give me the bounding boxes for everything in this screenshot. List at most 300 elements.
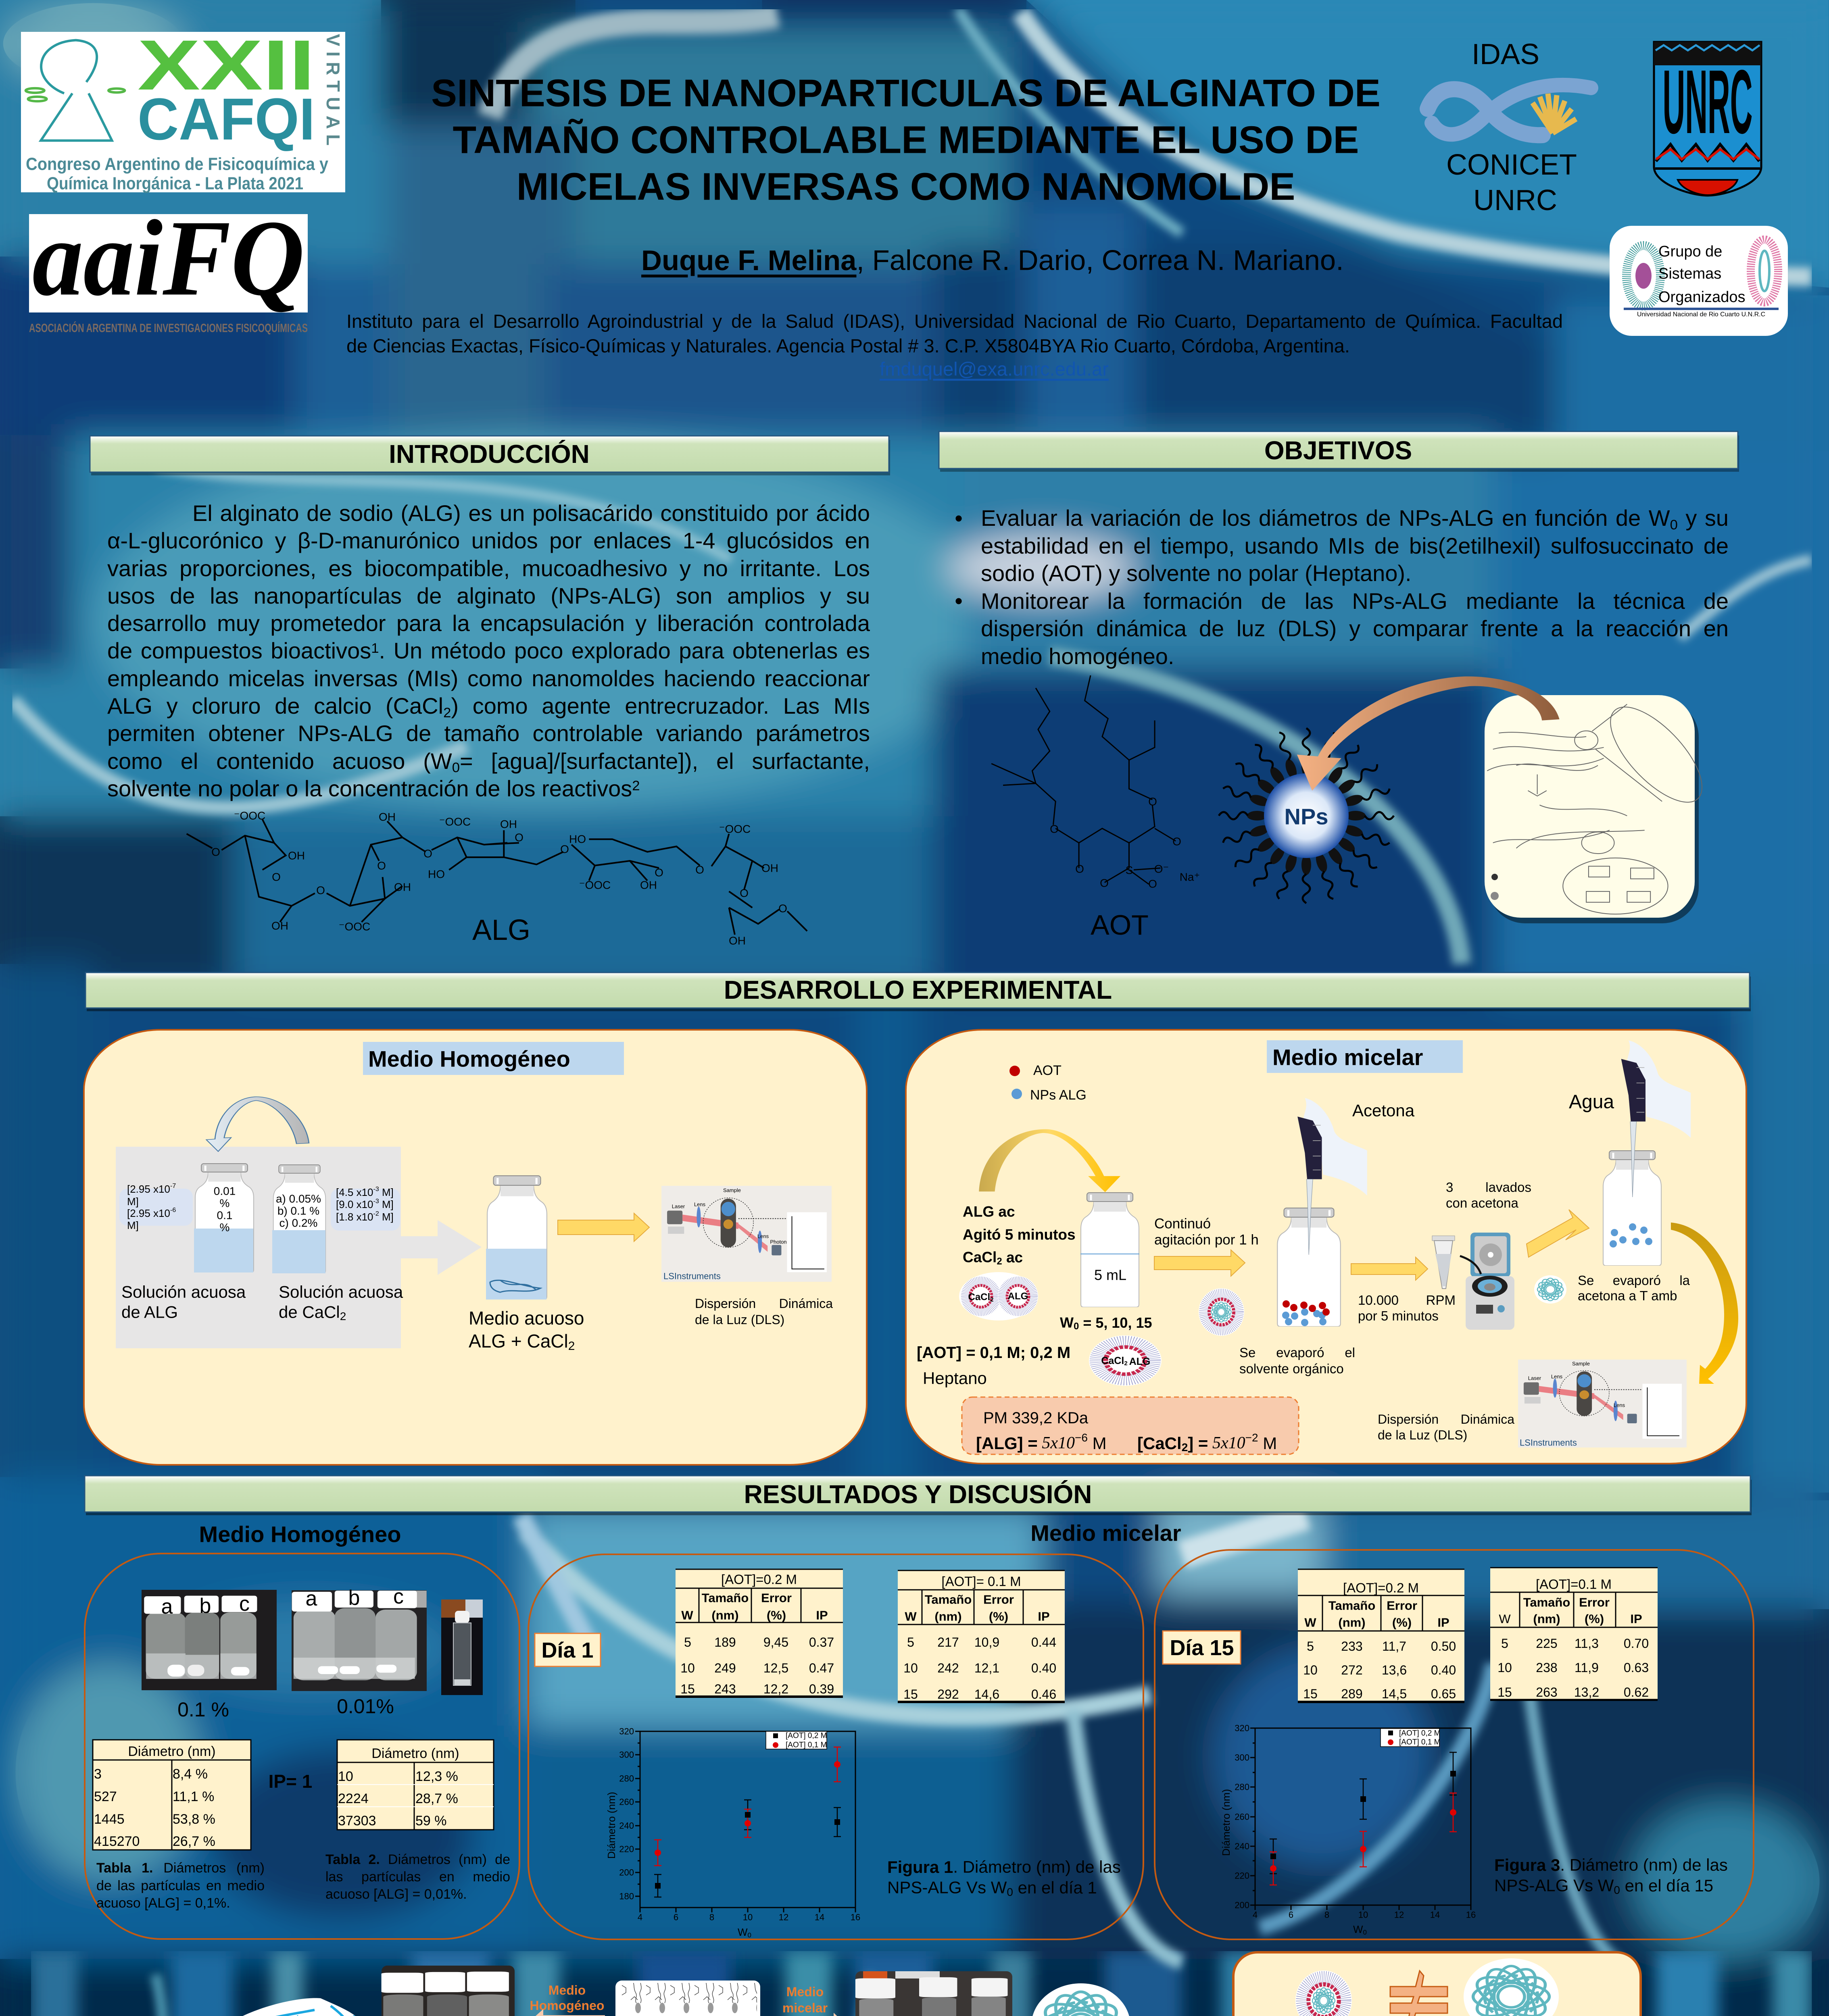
arrow: curved orange: [1297, 677, 1560, 791]
chemical structure: ALG: HO: [428, 868, 445, 881]
gray box with two solutions: %: [220, 1221, 229, 1234]
label: medio micelar: [782, 1985, 828, 2015]
gray box with two solutions: Solución acuosa: [121, 1282, 246, 1302]
chart: diameter vs W0 day 15: 200: [1235, 1900, 1249, 1910]
chemical structure: AOT: S: [1126, 864, 1133, 877]
table: AOT 0.2 M day 15: Error: [1387, 1598, 1417, 1613]
micelles: CaCl2 and ALG: CaCl: [968, 1292, 990, 1302]
chemical structure: AOT: AOT: [1091, 909, 1149, 941]
table: AOT 0.2 M day 15: 0.50: [1431, 1639, 1456, 1654]
table: AOT 0.2 M day 15: 13,6: [1382, 1663, 1407, 1677]
table: AOT 0.1 M day 15: (nm): [1533, 1612, 1560, 1626]
caption: figura 1: Figura 1. Diámetro (nm) de las: [887, 1857, 1121, 1876]
arrow: yellow: [558, 1213, 649, 1241]
label: medio homogéneo: Medio: [548, 1983, 586, 1997]
chemical structure: ALG: OH: [640, 879, 657, 891]
label: IP: IP= 1: [269, 1771, 312, 1792]
chemical structure: ALG: OH: [379, 810, 396, 823]
heading bar: DESARROLLO EXPERIMENTAL: DESARROLLO EXPERIMENTAL: [724, 975, 1112, 1004]
caption: figura 1: en el día 1: [1013, 1878, 1097, 1897]
label: Heptano: Heptano: [923, 1368, 987, 1388]
label: medio acuoso: ALG + CaCl: [469, 1331, 568, 1352]
illustration: aggregated alginate blob: [216, 1998, 362, 2016]
chart: diameter vs W0 day 15: W: [1353, 1923, 1363, 1935]
gray box with two solutions: M]: [379, 1211, 394, 1223]
caption: tabla 2: Tabla 2. Diámetros (nm) de: [325, 1852, 510, 1867]
gray box with two solutions: de CaCl: [279, 1302, 340, 1322]
chemical structure: ALG: OH: [271, 919, 288, 932]
logo: aaiFQ: aaiFQ: [32, 198, 304, 319]
caption: tabla 2: [325, 1851, 510, 1904]
chart: diameter vs W0 day 15: Diámetro (nm): [1220, 1789, 1232, 1856]
table: AOT 0.2 M day 1: (%): [767, 1608, 786, 1622]
table: AOT 0.1 M day 1: 14,6: [974, 1687, 999, 1702]
table 1: 527: [94, 1789, 117, 1804]
chemical structure: ALG: O: [655, 866, 663, 879]
table 1: 1445: [94, 1812, 125, 1827]
label: lavados: 3 lavados: [1446, 1180, 1531, 1195]
label: W0: 0: [1074, 1321, 1079, 1331]
table: AOT 0.2 M day 15: 10: [1303, 1663, 1318, 1677]
heading bar: OBJETIVOS: [939, 431, 1739, 472]
gray box with two solutions: -2: [373, 1210, 379, 1217]
table: AOT 0.2 M day 15: Tamaño: [1328, 1598, 1375, 1613]
table: AOT 0.2 M day 1: 5: [684, 1635, 691, 1649]
legend: [1009, 1063, 1087, 1103]
callout: concentrations: ] =: [1188, 1434, 1208, 1452]
chemical structure: ALG: O: [778, 902, 787, 914]
introduction text: solvente no polar o la concentración de los reactivos2: [107, 776, 640, 801]
caption: tabla 2: las partículas en medio: [325, 1869, 510, 1885]
caption: figura 1: 0: [1007, 1885, 1013, 1898]
reagent list: ac: [1002, 1249, 1023, 1265]
table 2: 2224: [338, 1791, 369, 1806]
caption: figura 3: 0: [1614, 1884, 1620, 1896]
table: AOT 0.1 M day 1: Error: [983, 1593, 1014, 1606]
image: DLS scheme: Laser: [672, 1203, 685, 1210]
legend: AOT: [1033, 1063, 1062, 1078]
table: AOT 0.1 M day 1: 292: [937, 1687, 959, 1702]
logo: IDAS CONICET UNRC: [1428, 38, 1591, 217]
chemical structure: ALG: ⁻OOC: [579, 879, 611, 891]
icon: not equal: [1390, 1971, 1447, 2016]
table: AOT 0.1 M day 15: 0.62: [1624, 1685, 1649, 1699]
image: DLS scheme: Lens: [757, 1233, 769, 1239]
table: AOT 0.2 M day 1: 0.39: [809, 1682, 834, 1696]
chart: diameter vs W0 day 15: 12: [1394, 1910, 1404, 1920]
micelles: CaCl2 and ALG: ALG: [1008, 1291, 1028, 1302]
chart: diameter vs W0 day 1: 4: [638, 1912, 642, 1922]
table: AOT 0.2 M day 1: 249: [714, 1661, 736, 1675]
gray box with two solutions: [116, 1147, 403, 1348]
chart: diameter vs W0 day 1: 14: [815, 1912, 824, 1922]
chemical structure: ALG: O: [272, 871, 281, 883]
label: 0.1 %: 0.1 %: [177, 1698, 229, 1721]
chart: diameter vs W0 day 1: 12: [779, 1912, 788, 1922]
logo: XXII CAFQI congress: [21, 26, 345, 194]
table: AOT 0.1 M day 15: W: [1499, 1612, 1511, 1626]
chart: diameter vs W0 day 15: 10: [1358, 1910, 1368, 1920]
table: AOT 0.1 M day 15: 238: [1536, 1660, 1558, 1675]
table 2: 59 %: [415, 1813, 447, 1829]
chart: diameter vs W0 day 15: 260: [1235, 1812, 1249, 1822]
authors: Duque F. Melina, Falcone R. Dario, Correa N. Mariano.: [641, 244, 1344, 276]
introduction text: [107, 500, 870, 803]
table: AOT 0.1 M day 1: IP: [1038, 1610, 1050, 1623]
chart: diameter vs W0 day 1: 0: [748, 1931, 751, 1939]
arrow: yellow 1: [1154, 1250, 1245, 1276]
label: se evaporó el solvente: solvente orgánico: [1239, 1361, 1344, 1376]
table 2: 37303: [338, 1813, 376, 1829]
chemical structure: ALG: ⁻OOC: [719, 823, 751, 835]
logo: Grupo de Sistemas Organizados: Grupo de: [1658, 243, 1722, 260]
table: AOT 0.2 M day 15: 0.65: [1431, 1687, 1456, 1701]
chart: diameter vs W0 day 1: 220: [619, 1844, 634, 1854]
introduction text: permiten obtener NPs-ALG de tamaño controlable variando parámetros: [107, 721, 870, 746]
arrow: gold curved right: [1671, 1223, 1738, 1384]
icon: microtube: [1432, 1236, 1455, 1289]
gray box with two solutions: M]: [127, 1219, 139, 1231]
caption: tabla 1: acuoso [ALG] = 0,1%.: [96, 1895, 230, 1911]
table: AOT 0.2 M day 1: 243: [714, 1682, 736, 1696]
caption: DLS: [695, 1295, 833, 1328]
caption: tabla 2: acuoso [ALG] = 0,01%.: [325, 1887, 467, 1902]
chart: diameter vs W0 day 1: Diámetro (nm): [605, 1792, 617, 1859]
chemical structure: AOT: Na⁺: [1180, 871, 1200, 883]
label: 0.01%: 0.01%: [337, 1695, 394, 1718]
table: AOT 0.1 M day 1: 0.44: [1031, 1635, 1056, 1649]
introduction text: de compuestos bioactivos1. Un método poco explorado para obtenerlas es: [107, 638, 870, 663]
callout: concentrations: −6: [1075, 1431, 1088, 1443]
table 2: 12,3 %: [415, 1769, 458, 1784]
table: AOT 0.2 M day 1: 0.37: [809, 1635, 834, 1649]
objectives list: Monitorear la formación de las NPs-ALG mediante la técnica de: [981, 588, 1729, 614]
introduction text: α-L-glucorónico y β-D-manurónico unidos por enlaces 1-4 glucósidos en: [107, 528, 870, 553]
panel: resultados medio homogéneo: [85, 1554, 519, 1939]
introduction text: desarrollo muy prometedor para la encapsulación y liberación controlada: [107, 610, 870, 636]
table: AOT 0.1 M day 15: Tamaño: [1523, 1595, 1570, 1610]
callout: concentrations: M: [1088, 1434, 1107, 1452]
chart: diameter vs W0 day 15: 8: [1324, 1910, 1329, 1920]
subheading: Medio micelar: Medio micelar: [1030, 1520, 1181, 1546]
vial: 5 mL: [1080, 1193, 1139, 1307]
chemical structure: AOT: O: [1172, 835, 1181, 848]
chart: diameter vs W0 day 1: 16: [851, 1912, 860, 1922]
table 1: [93, 1740, 251, 1850]
chart: diameter vs W0 day 1: 10: [743, 1912, 753, 1922]
table 1: 3: [94, 1766, 102, 1782]
image: DLS scheme: Sample: [1572, 1360, 1590, 1367]
label: continuó agitación: Continuó: [1154, 1216, 1211, 1231]
photo: vials 0.1 %: b: [200, 1594, 211, 1618]
image: DLS scheme: [1518, 1360, 1687, 1447]
chemical structure: AOT: O: [1148, 795, 1157, 808]
panel: día 1: [528, 1554, 1143, 1939]
arrow: to the left: [529, 2009, 605, 2016]
chart: diameter vs W0 day 1: 260: [619, 1797, 634, 1807]
gray box with two solutions: -7: [170, 1182, 176, 1189]
reagent list: [963, 1203, 1076, 1267]
chart: diameter vs W0 day 1: [605, 1727, 860, 1939]
chemical structure: ALG: O: [211, 846, 220, 858]
gray box with two solutions: -3: [373, 1185, 379, 1193]
table: AOT 0.1 M day 1: 12,1: [974, 1661, 999, 1675]
chemical structure: AOT: O: [1100, 877, 1109, 889]
arrow: large gray: [401, 1220, 482, 1275]
chart: diameter vs W0 day 15: 240: [1235, 1841, 1249, 1851]
gray box with two solutions: 2: [340, 1310, 346, 1322]
table: AOT 0.1 M day 15: 10: [1497, 1660, 1512, 1675]
gray box with two solutions: a) 0.05%: [276, 1193, 321, 1205]
chemical structure: ALG: O: [377, 860, 386, 872]
panel: Medio Homogéneo procedure: [84, 1030, 867, 1465]
table: AOT 0.2 M day 1: 0.47: [809, 1661, 834, 1675]
table: AOT 0.1 M day 15: 0.63: [1624, 1660, 1649, 1675]
table: AOT 0.2 M day 15: 233: [1341, 1639, 1363, 1654]
illustration: nanoparticle micelle: NPs: [1285, 804, 1328, 829]
subheading: Medio Homogéneo: Medio Homogéneo: [199, 1522, 401, 1547]
photo: vials 0.1 %: a: [161, 1595, 173, 1618]
title: TAMAÑO CONTROLABLE MEDIANTE EL USO DE: [453, 118, 1359, 161]
panel heading: Medio Homogéneo: [368, 1046, 570, 1072]
panel: día 15: [1155, 1550, 1754, 1939]
logo: Grupo de Sistemas Organizados: Sistemas: [1658, 265, 1721, 282]
label: se evaporó la acetona: Se evaporó la: [1578, 1273, 1690, 1288]
table 2: 28,7 %: [415, 1791, 458, 1806]
chemical structure: ALG: ⁻OOC: [339, 920, 370, 933]
illustration: nanoparticle micelle: [1219, 728, 1394, 903]
label: medio micelar: micelar: [782, 2001, 828, 2015]
table: AOT 0.2 M day 1: [676, 1569, 843, 1697]
table: AOT 0.2 M day 1: 12,5: [763, 1661, 788, 1675]
micelle: mixed: CaCl: [1101, 1355, 1124, 1366]
caption: tabla 1: [96, 1860, 265, 1913]
label: continuó agitación: [1154, 1216, 1259, 1248]
image: DLS scheme: Photon: [770, 1239, 787, 1245]
chart: diameter vs W0 day 1: 8: [709, 1912, 714, 1922]
chart: diameter vs W0 day 15: 0: [1363, 1928, 1367, 1936]
introduction text: varias proporciones, es biocompatible, mucoadhesivo y no irritante. Los: [107, 556, 870, 581]
image: DLS scheme: LSInstruments: [663, 1271, 721, 1281]
objectives list: •: [955, 588, 963, 614]
table: AOT 0.2 M day 15: [AOT]=0.2 M: [1343, 1581, 1419, 1595]
heading bar: DESARROLLO EXPERIMENTAL: [86, 973, 1751, 1011]
gray box with two solutions: [2.95 x10: [127, 1207, 170, 1219]
panel heading: Medio micelar: [1272, 1044, 1423, 1070]
heading bar: RESULTADOS Y DISCUSIÓN: [85, 1476, 1752, 1515]
image: DLS scheme: [661, 1186, 832, 1282]
introduction text: El alginato de sodio (ALG) es un polisacárido constituido por ácido: [192, 500, 870, 526]
table: AOT 0.1 M day 15: [AOT]=0.1 M: [1536, 1577, 1612, 1592]
gray box with two solutions: [9.0 x10: [336, 1198, 373, 1210]
title: [431, 72, 1381, 208]
chart: diameter vs W0 day 1: 280: [619, 1773, 634, 1784]
table 1: 53,8 %: [173, 1812, 215, 1827]
title: SINTESIS DE NANOPARTICULAS DE ALGINATO DE: [431, 72, 1381, 115]
table: AOT 0.2 M day 15: 5: [1307, 1639, 1314, 1654]
reagent list: Agitó 5 minutos: [963, 1227, 1076, 1243]
label: se evaporó el solvente: [1239, 1345, 1355, 1379]
image: DLS scheme: Sample: [723, 1187, 741, 1193]
table: AOT 0.1 M day 15: Error: [1579, 1595, 1610, 1610]
table 1: 415270: [94, 1834, 140, 1849]
caption: figura 3: [1494, 1856, 1728, 1896]
table: AOT 0.1 M day 15: 11,3: [1575, 1636, 1599, 1651]
objectives list: medio homogéneo.: [981, 644, 1174, 669]
chemical structure: ALG: O: [423, 848, 432, 860]
vial with particles and pipette: [1277, 1098, 1367, 1327]
table: AOT 0.1 M day 1: 242: [937, 1661, 959, 1675]
callout: concentrations: −2: [1245, 1431, 1258, 1443]
table: AOT 0.1 M day 1: 217: [937, 1635, 959, 1649]
icon: coil: [1534, 1275, 1566, 1304]
table: AOT 0.1 M day 15: 0.70: [1624, 1636, 1649, 1651]
chemical structure: ALG: ⁻OOC: [439, 815, 471, 828]
micelle: mixed: 2: [1124, 1360, 1128, 1367]
icon: centrifuge: [1460, 1233, 1514, 1330]
table: AOT 0.1 M day 15: 5: [1501, 1636, 1508, 1651]
vial with blue particles and pipette: [1603, 1040, 1691, 1266]
logo: IDAS CONICET UNRC: IDAS: [1472, 38, 1539, 71]
heading bar: INTRODUCCIÓN: [90, 436, 890, 475]
reagent list: CaCl: [963, 1249, 997, 1265]
caption: figura 3: en el día 15: [1620, 1876, 1713, 1895]
table: AOT 0.2 M day 15: [1298, 1569, 1464, 1702]
caption: figura 1: NPS-ALG Vs W: [887, 1878, 1007, 1897]
photo: micellar vials: [855, 1971, 1012, 2016]
table: AOT 0.2 M day 1: W: [681, 1608, 693, 1622]
chemical structure: ALG: OH: [761, 862, 778, 874]
table: AOT 0.1 M day 15: (%): [1585, 1612, 1604, 1626]
tag: Día 1: Día 1: [541, 1638, 594, 1662]
chart: diameter vs W0 day 15: 4: [1253, 1910, 1258, 1920]
table: AOT 0.1 M day 15: 263: [1536, 1685, 1558, 1699]
heading bar: INTRODUCCIÓN: INTRODUCCIÓN: [389, 439, 590, 469]
chemical structure: ALG: OH: [394, 881, 411, 893]
chemical structure: ALG: OH: [288, 849, 305, 862]
label: Agua: Agua: [1569, 1091, 1614, 1113]
micelle: mixed: ALG: [1129, 1356, 1150, 1367]
chemical structure: ALG: OH: [729, 935, 746, 947]
image: DLS scheme: Lens: [694, 1202, 706, 1207]
chemical structure: AOT: O: [1075, 863, 1084, 875]
label: se evaporó el solvente: Se evaporó el: [1239, 1345, 1355, 1360]
panel: comparison of diameters: [1233, 1952, 1641, 2016]
photo: homogeneous vials: [382, 1966, 515, 2016]
caption: figura 3: NPS-ALG Vs W: [1494, 1876, 1614, 1895]
label: medio acuoso: 2: [568, 1339, 575, 1352]
chemical structure: AOT: O: [1050, 823, 1059, 835]
legend: NPs ALG: [1030, 1087, 1087, 1103]
logo: XXII CAFQI congress: CAFQI: [138, 86, 315, 152]
table: AOT 0.2 M day 15: 0.40: [1431, 1663, 1456, 1677]
table: AOT 0.2 M day 15: (%): [1392, 1615, 1412, 1630]
table: AOT 0.2 M day 1: IP: [816, 1608, 828, 1622]
table: AOT 0.1 M day 1: 10,9: [974, 1635, 999, 1649]
table: AOT 0.1 M day 15: [1490, 1568, 1658, 1700]
objectives list: [955, 504, 1729, 671]
label: Acetona: Acetona: [1352, 1101, 1415, 1120]
label: lavados: con acetona: [1446, 1195, 1518, 1210]
heading bar: RESULTADOS Y DISCUSIÓN: RESULTADOS Y DISCUSIÓN: [744, 1480, 1092, 1509]
table 2: Diámetro (nm): [371, 1746, 459, 1761]
table: AOT 0.1 M day 15: 13,2: [1574, 1685, 1599, 1699]
chemical structure: ALG: ⁻OOC: [234, 810, 265, 822]
table: AOT 0.2 M day 1: 189: [714, 1635, 736, 1649]
gray box with two solutions: 0.01: [214, 1185, 236, 1198]
chemical structure: ALG: O: [560, 843, 569, 856]
image: DLS scheme: Lens: [1551, 1373, 1563, 1380]
micelles: CaCl2 and ALG: 2: [990, 1296, 994, 1303]
table: AOT 0.2 M day 15: 14,5: [1382, 1687, 1407, 1701]
logo: IDAS CONICET UNRC: UNRC: [1473, 184, 1557, 217]
table: AOT 0.1 M day 1: 0.40: [1031, 1661, 1056, 1675]
table: AOT 0.2 M day 1: [AOT]=0.2 M: [721, 1572, 797, 1587]
caption: figura 1: [887, 1857, 1121, 1898]
table: AOT 0.1 M day 1: 0.46: [1031, 1687, 1056, 1702]
heading bar: OBJETIVOS: OBJETIVOS: [1264, 436, 1412, 465]
label: RPM: por 5 minutos: [1358, 1308, 1439, 1323]
table: AOT 0.1 M day 1: W: [905, 1610, 917, 1623]
table: AOT 0.2 M day 15: (nm): [1338, 1615, 1366, 1630]
label: medio micelar: Medio: [786, 1985, 824, 1999]
gray box with two solutions: M]: [379, 1198, 394, 1210]
chart: diameter vs W0 day 1: 6: [674, 1912, 678, 1922]
label: RPM: 10.000 RPM: [1358, 1293, 1456, 1308]
gray box with two solutions: b) 0.1 %: [277, 1205, 319, 1217]
vial: mixture: [486, 1176, 547, 1300]
gray box with two solutions: 0.1: [217, 1209, 232, 1222]
introduction text: como el contenido acuoso (W0= [agua]/[surfactante]), el surfactante,: [107, 748, 870, 775]
table: AOT 0.1 M day 1: (nm): [934, 1610, 962, 1623]
gray box with two solutions: M]: [127, 1195, 139, 1208]
label: medio acuoso: Medio acuoso: [469, 1308, 584, 1329]
objectives list: sodio (AOT) y solvente no polar (Heptano).: [981, 560, 1412, 586]
chemical structure: ALG: O: [740, 887, 749, 899]
table: AOT 0.1 M day 15: IP: [1630, 1612, 1642, 1626]
reagent list: 2: [997, 1256, 1002, 1267]
chart: diameter vs W0 day 15: 320: [1235, 1723, 1249, 1733]
table: AOT 0.1 M day 15: 11,9: [1575, 1660, 1599, 1675]
photo: vials 0.1 %: [142, 1590, 277, 1690]
photo: vials 0.01 %: b: [348, 1586, 360, 1610]
logo: Grupo de Sistemas Organizados: [1610, 226, 1788, 336]
tag: Día 15: Día 15: [1170, 1636, 1234, 1660]
table 1: Diámetro (nm): [128, 1744, 216, 1759]
objectives list: dispersión dinámica de luz (DLS) y comparar frente a la reacción en: [981, 616, 1729, 641]
title: MICELAS INVERSAS COMO NANOMOLDE: [517, 165, 1295, 208]
label: lavados: [1446, 1179, 1531, 1213]
vial: 5 mL: 5 mL: [1094, 1267, 1126, 1283]
label: continuó agitación: agitación por 1 h: [1154, 1232, 1259, 1248]
logo: XXII CAFQI congress: XXII: [138, 26, 315, 105]
chemical structure: ALG: O: [316, 884, 325, 897]
caption: tabla 1: Tabla 1. Diámetros (nm): [96, 1860, 265, 1876]
introduction text: usos de las nanopartículas de alginato (NPs-ALG) son amplios y su: [107, 583, 870, 608]
reagent list: ALG ac: [963, 1203, 1015, 1220]
arrow: yellow diagonal: [1527, 1210, 1589, 1257]
chemical structure: AOT: O: [1148, 877, 1157, 890]
caption: tabla 1: de las partículas en medio: [96, 1878, 265, 1893]
email: fmduquel@exa.unrc.edu.ar: [880, 358, 1109, 380]
affiliation: Instituto para el Desarrollo Agroindustrial y de la Salud (IDAS), Universidad Nacional de Rio Cuarto, Departamento de Química. Facultad: [346, 310, 1563, 332]
chemical structure: ALG: [187, 810, 807, 947]
gray box with two solutions: [2.95 x10: [127, 1183, 170, 1195]
chart: diameter vs W0 day 1: 240: [619, 1821, 634, 1831]
table: AOT 0.1 M day 1: 15: [903, 1687, 918, 1702]
chart: diameter vs W0 day 15: 280: [1235, 1782, 1249, 1792]
label: medio homogéneo: Homogéneo: [530, 1998, 604, 2013]
